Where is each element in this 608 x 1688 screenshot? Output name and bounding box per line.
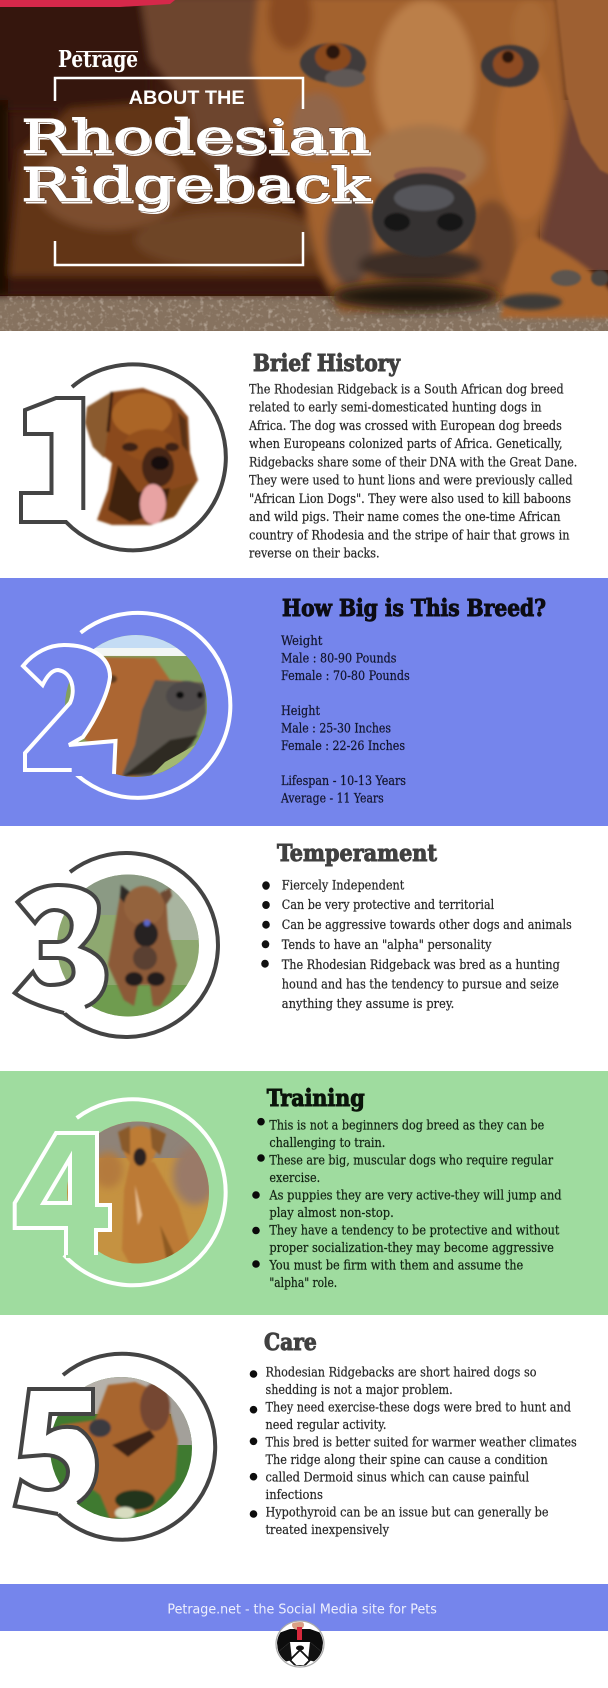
list: care tips: treated inexpensively	[266, 1523, 389, 1538]
list: training tips: exercise.	[269, 1171, 320, 1186]
text: size and lifespan facts: Male : 80-90 Pounds	[281, 652, 396, 666]
list: training tips: This is not a beginners dog breed as they can be	[269, 1118, 544, 1134]
list: care tips: need regular activity.	[266, 1418, 386, 1433]
text: size and lifespan facts: Female : 70-80 Pounds	[281, 669, 410, 684]
number 2 with ring	[23, 613, 230, 798]
list: training tips	[268, 1118, 562, 1291]
paragraph: history text: Africa. The dog was crossed with European dog breeds	[248, 419, 562, 434]
heading: how big: How Big is This Breed?	[282, 595, 546, 622]
list: temperament traits: hound and has the tendency to pursue and seize	[282, 978, 559, 992]
list: temperament traits: anything they assume is prey.	[282, 997, 454, 1012]
panel: brief history	[0, 331, 608, 578]
list: training tips: proper socialization-they may become aggressive	[269, 1241, 554, 1256]
bullets: care	[250, 1370, 257, 1518]
list: temperament traits	[282, 878, 572, 1012]
footer text: Petrage.net - the Social Media site for Pets	[167, 1602, 437, 1618]
paragraph: history text: country of Rhodesia and the stripe of hair that grows in	[249, 528, 570, 544]
heading: training: Training	[267, 1085, 365, 1112]
list: care tips: This bred is better suited for warmer weather climates	[266, 1436, 577, 1450]
panel: temperament	[12, 844, 572, 1039]
heading: temperament: Temperament	[277, 840, 437, 867]
list: training tips: challenging to train.	[269, 1136, 385, 1151]
paragraph: history text: related to early semi-domesticated hunting dogs in	[249, 400, 542, 416]
icon: bulldog logo	[276, 1620, 324, 1667]
bullets: temperament	[261, 881, 270, 968]
paragraph: history text: Ridgebacks share some of their DNA with the Great Dane.	[249, 456, 577, 470]
list: care tips: The ridge along their spine can cause a condition	[266, 1453, 548, 1468]
panel: care	[12, 1332, 576, 1542]
title: Rhodesian Ridgeback: Rhodesian	[21, 110, 370, 165]
list: temperament traits: Fiercely Independent	[282, 878, 405, 894]
list: care tips: shedding is not a major problem.	[266, 1383, 453, 1398]
paragraph: history text: The Rhodesian Ridgeback is a South African dog breed	[249, 382, 564, 398]
hero image: dog face on carpet	[0, 0, 608, 331]
list: temperament traits: Can be very protective and territorial	[282, 898, 494, 913]
list: temperament traits: Can be aggressive towards other dogs and animals	[282, 918, 572, 933]
paragraph: history text: "African Lion Dogs". They were also used to kill baboons	[249, 492, 571, 507]
list: training tips: play almost non-stop.	[269, 1206, 394, 1221]
heading: care: Care	[264, 1329, 317, 1356]
list: temperament traits: The Rhodesian Ridgeback was bred as a hunting	[282, 958, 560, 973]
paragraph: history text: reverse on their backs.	[249, 546, 380, 562]
panel: hero photo header	[0, 0, 608, 331]
panel: how big is this breed	[0, 578, 608, 826]
text: size and lifespan facts: Weight	[281, 634, 323, 649]
text: size and lifespan facts: Female : 22-26 Inches	[281, 739, 405, 754]
dog profile photo	[65, 635, 207, 777]
list: training tips: You must be firm with them and assume the	[268, 1258, 523, 1274]
paragraph: history text: and wild pigs. Their name comes the one-time African	[249, 510, 561, 525]
paragraph: history text	[248, 382, 577, 562]
title frame	[55, 78, 303, 265]
list: training tips: They have a tendency to be protective and without	[269, 1224, 560, 1238]
text: size and lifespan facts: Height	[281, 704, 320, 719]
sitting dog photo	[67, 1122, 209, 1264]
lying dog photo	[50, 1377, 192, 1519]
number 3 with ring	[15, 853, 218, 1037]
text: size and lifespan facts: Male : 25-30 Inches	[281, 722, 391, 736]
subtitle: About the: ABOUT THE	[129, 88, 245, 109]
list: training tips: These are big, muscular dogs who require regular	[269, 1154, 553, 1168]
bullets: training	[252, 1118, 265, 1268]
number 5 with ring	[15, 1354, 215, 1540]
list: care tips: called Dermoid sinus which can cause painful	[266, 1470, 529, 1486]
list: care tips: Hypothyroid can be an issue but can generally be	[266, 1506, 549, 1520]
list: care tips: infections	[266, 1488, 323, 1503]
heading: brief history: Brief History	[253, 350, 401, 377]
list: training tips: As puppies they are very active-they will jump and	[268, 1188, 562, 1204]
logo text: Petrage: Petrage	[58, 46, 138, 73]
panel: footer band	[0, 1584, 608, 1631]
dog head photo	[85, 388, 198, 525]
title: Rhodesian Ridgeback	[21, 110, 371, 213]
list: training tips: "alpha" role.	[269, 1276, 337, 1291]
list: care tips	[266, 1366, 577, 1538]
paragraph: history text: They were used to hunt lions and were previously called	[249, 474, 573, 488]
list: care tips: Rhodesian Ridgebacks are short haired dogs so	[266, 1366, 536, 1380]
text: size and lifespan facts: Average - 11 Years	[280, 792, 384, 806]
number 1 with ring	[21, 364, 226, 550]
list: temperament traits: Tends to have an "alpha" personality	[282, 938, 492, 953]
running dog photo	[57, 874, 199, 1016]
paragraph: history text: when Europeans colonized parts of Africa. Genetically,	[249, 437, 563, 452]
panel: training	[0, 1071, 608, 1315]
list: care tips: They need exercise-these dogs were bred to hunt and	[266, 1400, 571, 1416]
title: Rhodesian Ridgeback: Ridgeback	[21, 158, 371, 213]
text: size and lifespan facts	[280, 634, 410, 806]
text: size and lifespan facts: Lifespan - 10-13 Years	[281, 774, 406, 789]
number 4 with ring	[15, 1099, 226, 1285]
